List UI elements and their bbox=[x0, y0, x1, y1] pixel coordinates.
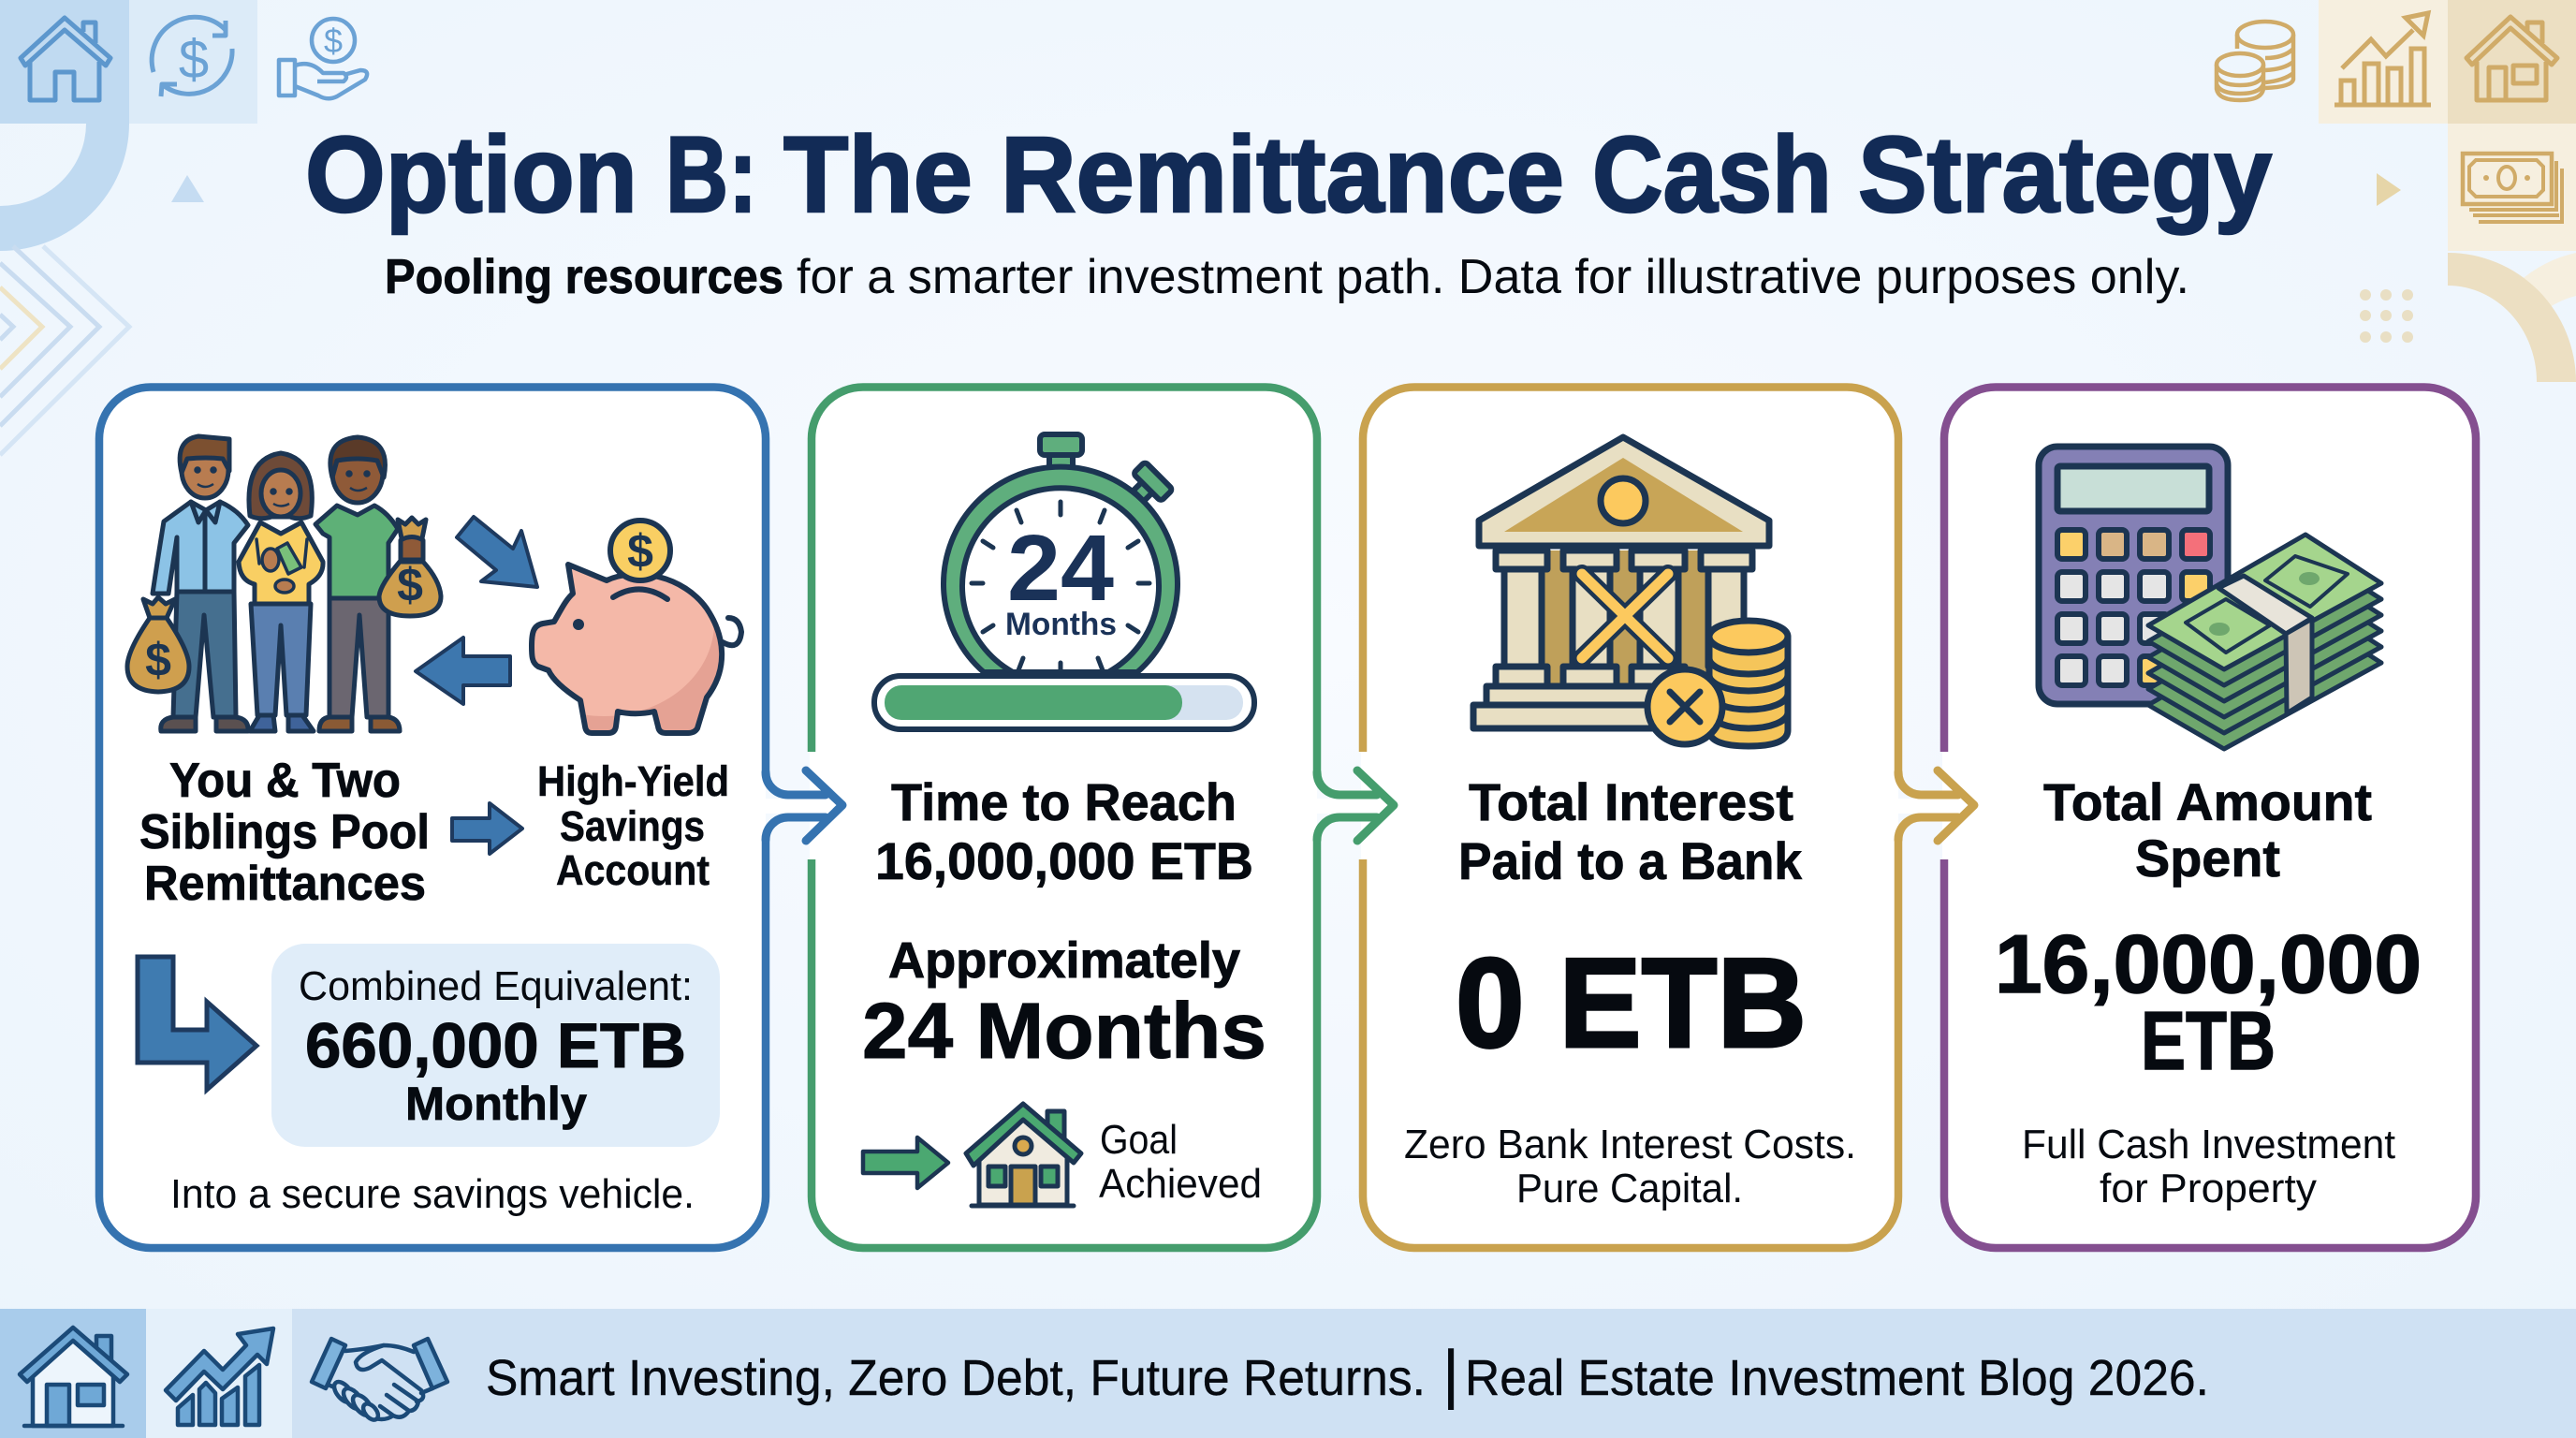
heading: Total Amount bbox=[2043, 772, 2372, 831]
label: goal achieved: Achieved bbox=[1099, 1161, 1262, 1207]
footer text: Real Estate Investment Blog 2026. bbox=[1465, 1350, 2209, 1406]
callout: combined equivalent bbox=[271, 944, 720, 1147]
decorative: top-left shapes bbox=[0, 124, 204, 455]
key stat: 16,000,000 ETB bbox=[1995, 917, 2422, 1087]
arrow: panel 3 to panel 4 bbox=[1898, 770, 1974, 841]
caption: Pure Capital. bbox=[1516, 1166, 1743, 1211]
caption: Into a secure savings vehicle. bbox=[170, 1171, 695, 1217]
label: savings account: Account bbox=[556, 846, 710, 894]
icon: coin stacks bbox=[2217, 22, 2293, 100]
footer icon: handshake bbox=[312, 1339, 447, 1423]
caption bbox=[2022, 1122, 2395, 1211]
icon: hand holding coin: $ bbox=[324, 22, 343, 60]
icon: calculator and cash bbox=[2039, 447, 2381, 749]
arrow: back to siblings bbox=[416, 638, 510, 704]
label: pool remittances: You & Two bbox=[169, 754, 401, 808]
icon tile: circular dollar: $ bbox=[179, 29, 209, 90]
illustration: three siblings with money bags: $ bbox=[145, 634, 171, 686]
illustration: piggy bank with coin: $ bbox=[627, 525, 653, 578]
icon tile: house bbox=[0, 0, 129, 124]
title: Strategy bbox=[1858, 115, 2272, 235]
icon tile: growth chart bbox=[2319, 0, 2448, 124]
footer icon: house bbox=[0, 1309, 146, 1438]
heading bbox=[875, 772, 1253, 890]
caption: Full Cash Investment bbox=[2022, 1122, 2395, 1167]
icon: house goal bbox=[966, 1104, 1081, 1206]
footer text bbox=[486, 1337, 2209, 1410]
panel: pooling remittances bbox=[99, 388, 766, 1248]
caption: Zero Bank Interest Costs. bbox=[1404, 1122, 1856, 1167]
icon tile: circular dollar bbox=[129, 0, 257, 124]
arrow: into piggy bank bbox=[457, 517, 537, 587]
key stat: 0 ETB: 0 ETB bbox=[1456, 932, 1807, 1074]
key stat: 24 months: 24 Months bbox=[862, 987, 1266, 1075]
footer text: | bbox=[1442, 1337, 1459, 1410]
label: savings account: Savings bbox=[560, 802, 705, 850]
progress bar bbox=[874, 676, 1254, 729]
arrow: down and right to combined amount bbox=[138, 957, 256, 1090]
icon: stopwatch: 24 bbox=[1007, 516, 1114, 621]
key stat: 16,000,000 ETB: ETB bbox=[2141, 994, 2276, 1087]
subtitle: Pooling resources bbox=[385, 250, 783, 304]
heading: Paid to a Bank bbox=[1458, 831, 1803, 890]
label: goal achieved bbox=[1099, 1117, 1262, 1207]
arrow: to goal bbox=[863, 1137, 948, 1188]
caption bbox=[1404, 1122, 1856, 1211]
footer icon: growth chart bbox=[146, 1309, 292, 1438]
title: The bbox=[783, 115, 973, 235]
title: Remittance bbox=[1001, 115, 1564, 235]
footer text: Smart Investing, Zero Debt, Future Returns. bbox=[486, 1350, 1426, 1406]
icon: crossed-out bank with coins bbox=[1473, 437, 1788, 746]
panel: total amount spent bbox=[1942, 388, 2476, 1248]
illustration: three siblings with money bags bbox=[127, 436, 441, 731]
key stat: 24 months bbox=[862, 932, 1266, 1075]
panel: total interest bbox=[1361, 388, 1898, 1248]
footer band bbox=[0, 1309, 2576, 1438]
callout: combined equivalent: Combined Equivalent: bbox=[299, 963, 693, 1009]
title: Cash bbox=[1592, 115, 1832, 235]
heading: Spent bbox=[2135, 829, 2280, 888]
heading: 16,000,000 ETB bbox=[875, 831, 1253, 890]
title bbox=[305, 115, 2272, 235]
icon tile: banknotes bbox=[2448, 124, 2576, 251]
icon: stopwatch bbox=[944, 434, 1178, 672]
arrow: panel 2 to panel 3 bbox=[1317, 770, 1394, 841]
label: savings account bbox=[537, 757, 729, 894]
heading bbox=[1458, 772, 1803, 890]
key stat: 16,000,000 ETB: 16,000,000 bbox=[1995, 917, 2422, 1010]
illustration: three siblings with money bags: $ bbox=[397, 559, 423, 611]
panel: time to reach bbox=[810, 388, 1317, 1248]
decorative: top-right shapes bbox=[2360, 173, 2576, 382]
title: B: bbox=[666, 115, 757, 235]
label: goal achieved: Goal bbox=[1100, 1117, 1178, 1163]
icon: stopwatch: Months bbox=[1005, 607, 1117, 642]
caption: for Property bbox=[2100, 1166, 2317, 1211]
illustration: piggy bank with coin bbox=[529, 518, 744, 736]
title: Option bbox=[305, 115, 637, 235]
label: pool remittances bbox=[139, 754, 430, 911]
callout: combined equivalent: Monthly bbox=[405, 1078, 587, 1130]
arrow: panel 1 to panel 2 bbox=[766, 770, 842, 841]
key stat: 24 months: Approximately bbox=[888, 932, 1240, 989]
label: pool remittances: Remittances bbox=[144, 857, 426, 911]
arrow: small to savings bbox=[452, 803, 522, 854]
callout: combined equivalent: 660,000 ETB bbox=[305, 1010, 686, 1081]
heading: Time to Reach bbox=[891, 772, 1237, 831]
heading bbox=[2043, 772, 2372, 888]
icon tile: house gold bbox=[2448, 0, 2576, 124]
subtitle: for a smarter investment path. Data for illustrative purposes only. bbox=[797, 250, 2189, 304]
label: pool remittances: Siblings Pool bbox=[139, 805, 430, 859]
label: savings account: High-Yield bbox=[537, 757, 729, 805]
icon: hand holding coin bbox=[279, 19, 367, 98]
heading: Total Interest bbox=[1469, 772, 1793, 831]
